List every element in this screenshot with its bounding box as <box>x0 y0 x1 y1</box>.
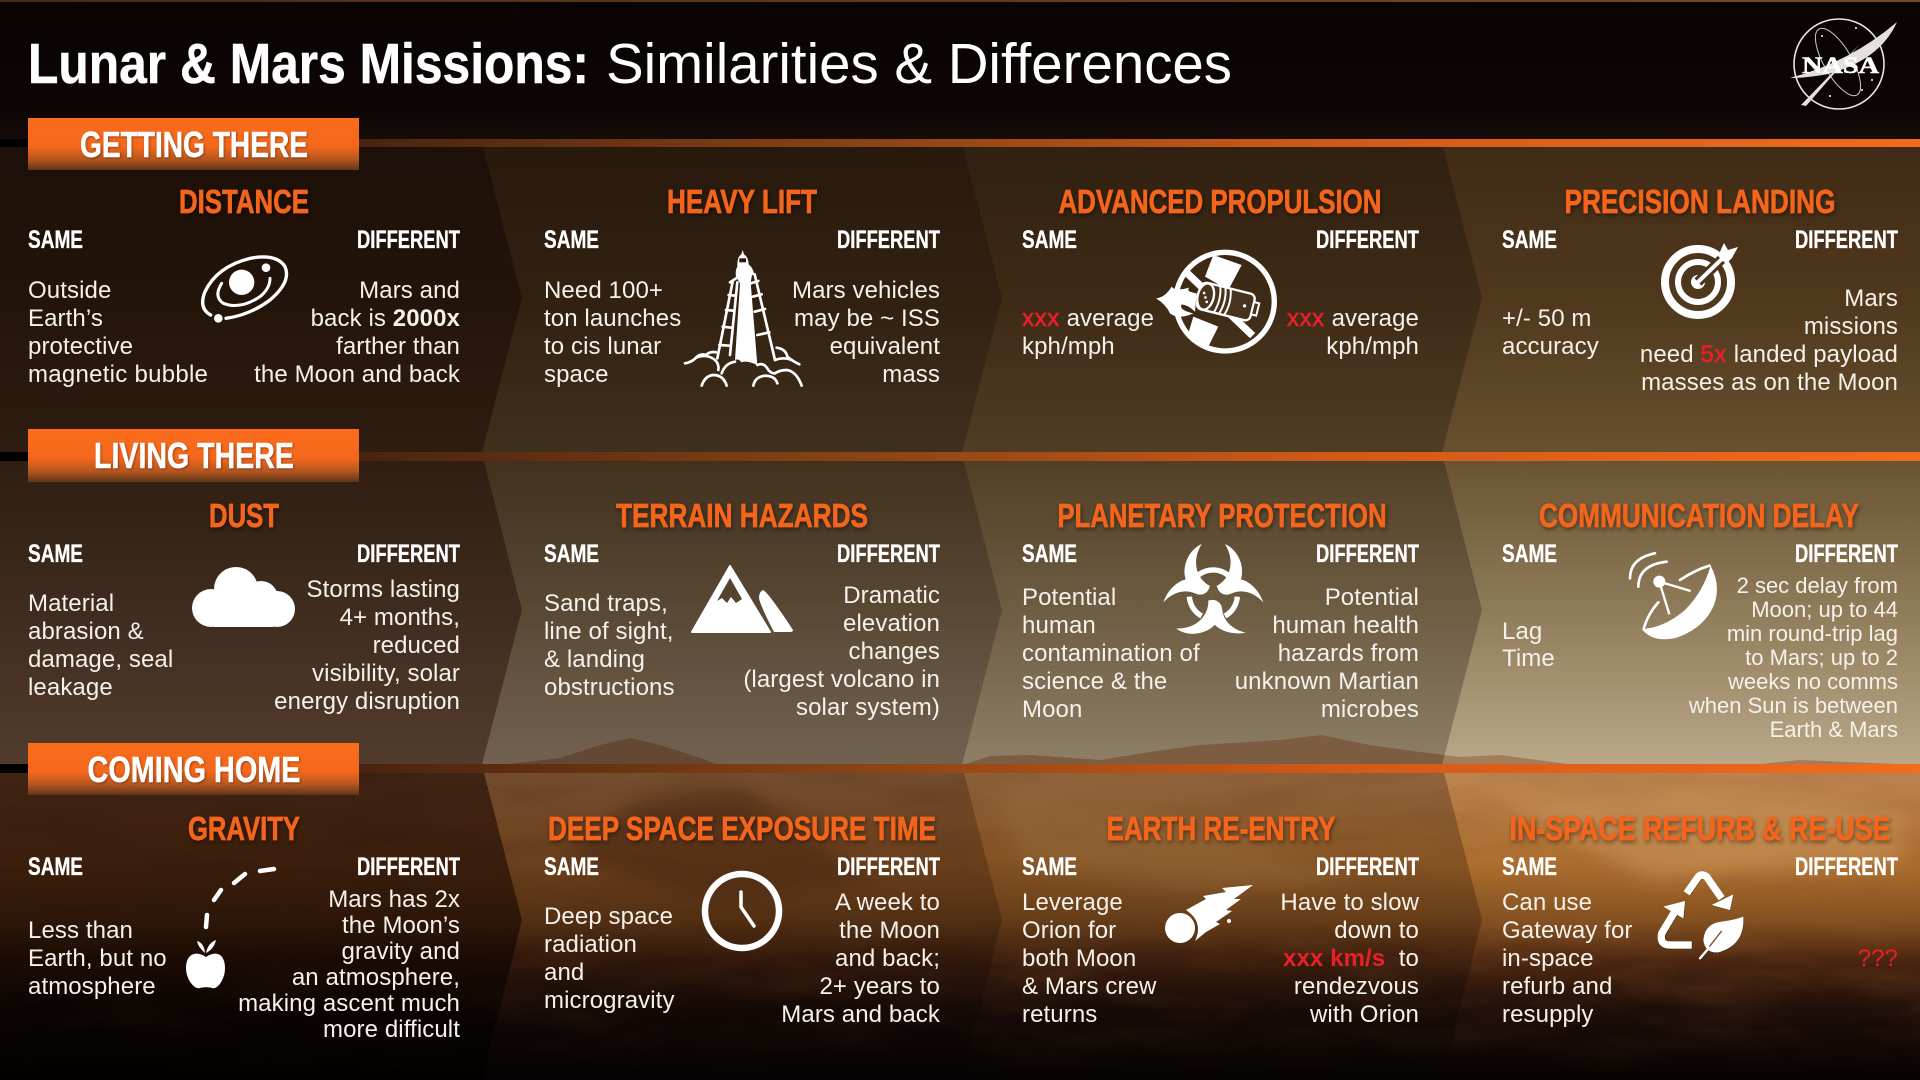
different column: precision landing: need 5x landed payload <box>1640 341 1898 368</box>
title <box>28 32 1232 96</box>
different column: distance: back is 2000x <box>311 305 461 332</box>
same column: heavy lift <box>544 226 681 388</box>
same column: planetary protection: Potential <box>1022 584 1116 611</box>
heading: terrain hazards: TERRAIN HAZARDS <box>616 497 868 534</box>
same column: in-space refurb: refurb and <box>1502 973 1612 1000</box>
same column: planetary protection: Moon <box>1022 696 1082 723</box>
panel: terrain hazards <box>544 497 940 721</box>
different column: distance: the Moon and back <box>254 361 461 388</box>
different column: deep space exposure <box>781 853 941 1028</box>
same column: earth re-entry: SAME <box>1022 853 1077 881</box>
different column: heavy lift: mass <box>882 361 940 388</box>
same column: gravity: SAME <box>28 853 83 881</box>
same column: earth re-entry: & Mars crew <box>1022 973 1157 1000</box>
different column: terrain hazards: (largest volcano in <box>743 666 940 693</box>
same column: distance: SAME <box>28 226 83 254</box>
same column: communication delay: Time <box>1502 645 1555 672</box>
panel: communication delay <box>1502 497 1898 742</box>
panel: deep space exposure time <box>544 810 941 1028</box>
icon: NASA logo <box>1790 19 1897 109</box>
same column: terrain hazards: obstructions <box>544 674 675 701</box>
different column: planetary protection <box>1235 540 1419 723</box>
different column: terrain hazards: Dramatic <box>843 582 940 609</box>
panel: earth re-entry <box>1022 810 1420 1028</box>
panel: in-space refurb and re-use <box>1502 810 1898 1028</box>
different column: precision landing: masses as on the Moon <box>1641 369 1898 396</box>
section badge: getting there <box>28 118 359 170</box>
same column: gravity: Less than <box>28 917 133 944</box>
different column: dust: energy disruption <box>274 688 460 715</box>
section badge: living there: LIVING THERE <box>94 435 294 476</box>
title: Similarities & Differences <box>606 32 1232 96</box>
different column: in-space refurb: ??? <box>1858 945 1898 972</box>
icon: biohazard <box>1163 544 1263 662</box>
panel: gravity <box>28 810 460 1043</box>
different column: planetary protection: unknown Martian <box>1235 668 1419 695</box>
heading: heavy lift: HEAVY LIFT <box>667 183 817 220</box>
icon: rocket <box>685 250 802 386</box>
heading: planetary protection: PLANETARY PROTECTION <box>1058 497 1386 534</box>
heading: advanced propulsion: ADVANCED PROPULSION <box>1058 183 1382 220</box>
same column: heavy lift: space <box>544 361 609 388</box>
different column: distance: Mars and <box>359 277 460 304</box>
different column: gravity: DIFFERENT <box>357 853 460 881</box>
heading: precision landing: PRECISION LANDING <box>1564 183 1836 220</box>
title: Lunar & Mars Missions: <box>28 32 589 96</box>
same column: earth re-entry: Orion for <box>1022 917 1116 944</box>
different column: communication delay: 2 sec delay from <box>1737 573 1898 598</box>
different column: planetary protection: hazards from <box>1278 640 1419 667</box>
icon: falling apple <box>186 869 274 988</box>
same column: in-space refurb: SAME <box>1502 853 1557 881</box>
same column: heavy lift: Need 100+ <box>544 277 663 304</box>
icon: target with arrow <box>1665 243 1738 315</box>
icon: orbit <box>203 257 287 323</box>
different column: dust: reduced <box>373 632 460 659</box>
same column: planetary protection: SAME <box>1022 540 1077 568</box>
different column: terrain hazards: solar system) <box>796 694 940 721</box>
different column: gravity: an atmosphere, <box>292 964 460 991</box>
same column: distance: Outside <box>28 277 111 304</box>
different column: precision landing: Mars <box>1844 285 1898 312</box>
same column: dust: Material <box>28 590 114 617</box>
heading: earth re-entry: EARTH RE-ENTRY <box>1106 810 1336 847</box>
same column: earth re-entry: both Moon <box>1022 945 1136 972</box>
different column: heavy lift: may be ~ ISS <box>794 305 940 332</box>
same column: distance <box>28 226 208 388</box>
different column: gravity: gravity and <box>342 938 460 965</box>
different column: dust: DIFFERENT <box>357 540 460 568</box>
panel: precision landing <box>1502 183 1898 396</box>
same column: precision landing: +/- 50 m <box>1502 305 1592 332</box>
different column: earth re-entry: rendezvous <box>1294 973 1419 1000</box>
same column: planetary protection: contamination of <box>1022 640 1200 667</box>
different column: heavy lift: equivalent <box>830 333 940 360</box>
different column: distance: DIFFERENT <box>357 226 460 254</box>
icon: spacecraft with solar panels <box>1156 252 1274 351</box>
same column: deep space exposure: radiation <box>544 931 637 958</box>
different column: terrain hazards: elevation <box>843 610 940 637</box>
icon: mountains <box>692 566 793 632</box>
same column: deep space exposure: SAME <box>544 853 599 881</box>
different column: earth re-entry: xxx km/s to <box>1283 945 1419 972</box>
different column: terrain hazards: changes <box>849 638 940 665</box>
different column: precision landing: missions <box>1804 313 1898 340</box>
different column: deep space exposure: the Moon <box>839 917 940 944</box>
same column: advanced propulsion <box>1022 226 1154 360</box>
section badge: getting there: GETTING THERE <box>80 124 308 165</box>
different column: deep space exposure: Mars and back <box>781 1001 941 1028</box>
same column: heavy lift: ton launches <box>544 305 681 332</box>
different column: gravity: the Moon’s <box>342 912 460 939</box>
same column: heavy lift: SAME <box>544 226 599 254</box>
different column: terrain hazards <box>743 540 940 721</box>
icon: satellite dish <box>1630 553 1717 639</box>
different column: deep space exposure: and back; <box>835 945 940 972</box>
same column: dust: leakage <box>28 674 113 701</box>
same column: advanced propulsion: xxx average <box>1022 305 1154 332</box>
same column: communication delay: Lag <box>1502 618 1542 645</box>
different column: communication delay: when Sun is between <box>1688 693 1898 718</box>
same column: earth re-entry <box>1022 853 1157 1028</box>
different column: deep space exposure: A week to <box>835 889 940 916</box>
same column: in-space refurb: in-space <box>1502 945 1594 972</box>
same column: in-space refurb: resupply <box>1502 1001 1594 1028</box>
same column: distance: Earth’s <box>28 305 103 332</box>
same column: distance: protective <box>28 333 133 360</box>
same column: dust: SAME <box>28 540 83 568</box>
same column: dust <box>28 540 173 701</box>
same column: terrain hazards: Sand traps, <box>544 590 668 617</box>
same column: precision landing <box>1502 226 1599 360</box>
different column: gravity: Mars has 2x <box>328 886 460 913</box>
same column: deep space exposure <box>544 853 675 1014</box>
icon: recycle with leaf <box>1661 875 1743 958</box>
same column: terrain hazards: line of sight, <box>544 618 673 645</box>
same column: dust: damage, seal <box>28 646 173 673</box>
different column: gravity: making ascent much <box>238 990 460 1017</box>
same column: terrain hazards: SAME <box>544 540 599 568</box>
same column: advanced propulsion: kph/mph <box>1022 333 1115 360</box>
icon: NASA logo: NASA <box>1802 53 1879 78</box>
different column: distance <box>254 226 461 388</box>
different column: communication delay <box>1688 540 1898 742</box>
same column: deep space exposure: and <box>544 959 584 986</box>
heading: distance: DISTANCE <box>179 183 309 220</box>
same column: advanced propulsion: SAME <box>1022 226 1077 254</box>
same column: earth re-entry: returns <box>1022 1001 1097 1028</box>
different column: earth re-entry: Have to slow <box>1280 889 1420 916</box>
panel: advanced propulsion <box>1022 183 1419 360</box>
different column: heavy lift: DIFFERENT <box>837 226 940 254</box>
different column: deep space exposure: 2+ years to <box>819 973 940 1000</box>
same column: precision landing: SAME <box>1502 226 1557 254</box>
same column: planetary protection <box>1022 540 1200 723</box>
different column: gravity: more difficult <box>323 1016 460 1043</box>
panel: dust <box>28 497 460 715</box>
same column: earth re-entry: Leverage <box>1022 889 1123 916</box>
heading: gravity: GRAVITY <box>188 810 300 847</box>
panel: planetary protection <box>1022 497 1419 723</box>
different column: earth re-entry <box>1280 853 1420 1028</box>
same column: precision landing: accuracy <box>1502 333 1599 360</box>
different column: planetary protection: human health <box>1272 612 1419 639</box>
same column: gravity: atmosphere <box>28 973 156 1000</box>
different column: communication delay: weeks no comms <box>1727 669 1898 694</box>
panel: heavy lift <box>544 183 940 388</box>
different column: dust: Storms lasting <box>307 576 460 603</box>
same column: heavy lift: to cis lunar <box>544 333 661 360</box>
different column: planetary protection: Potential <box>1325 584 1419 611</box>
same column: planetary protection: human <box>1022 612 1096 639</box>
different column: precision landing <box>1640 226 1898 396</box>
different column: dust: visibility, solar <box>312 660 460 687</box>
same column: deep space exposure: Deep space <box>544 903 673 930</box>
different column: distance: farther than <box>336 333 460 360</box>
different column: terrain hazards: DIFFERENT <box>837 540 940 568</box>
different column: planetary protection: DIFFERENT <box>1316 540 1419 568</box>
same column: dust: abrasion & <box>28 618 144 645</box>
icon: dust cloud <box>192 567 295 627</box>
heading: dust: DUST <box>209 497 279 534</box>
section badge: coming home: COMING HOME <box>88 749 300 790</box>
icon: clock <box>705 874 779 948</box>
different column: gravity <box>238 853 460 1043</box>
different column: in-space refurb <box>1795 853 1898 972</box>
different column: communication delay: Moon; up to 44 <box>1751 597 1898 622</box>
different column: communication delay: Earth & Mars <box>1770 717 1898 742</box>
same column: gravity: Earth, but no <box>28 945 167 972</box>
different column: earth re-entry: DIFFERENT <box>1316 853 1419 881</box>
same column: in-space refurb: Gateway for <box>1502 917 1632 944</box>
different column: dust: 4+ months, <box>340 604 460 631</box>
same column: planetary protection: science & the <box>1022 668 1167 695</box>
same column: communication delay: SAME <box>1502 540 1557 568</box>
same column: distance: magnetic bubble <box>28 361 208 388</box>
icon: comet <box>1161 885 1253 947</box>
section badge: coming home <box>28 743 359 795</box>
same column: communication delay <box>1502 540 1557 672</box>
different column: heavy lift <box>792 226 940 388</box>
same column: gravity <box>28 853 167 1000</box>
different column: advanced propulsion: kph/mph <box>1326 333 1419 360</box>
different column: communication delay: to Mars; up to 2 <box>1745 645 1898 670</box>
different column: advanced propulsion: DIFFERENT <box>1316 226 1419 254</box>
different column: communication delay: min round-trip lag <box>1727 621 1898 646</box>
same column: terrain hazards <box>544 540 675 701</box>
different column: earth re-entry: down to <box>1334 917 1419 944</box>
different column: dust <box>274 540 460 715</box>
different column: advanced propulsion <box>1287 226 1419 360</box>
same column: deep space exposure: microgravity <box>544 987 675 1014</box>
different column: advanced propulsion: xxx average <box>1287 305 1419 332</box>
different column: heavy lift: Mars vehicles <box>792 277 940 304</box>
same column: in-space refurb: Can use <box>1502 889 1592 916</box>
heading: deep space exposure time: DEEP SPACE EXPOSURE TIME <box>548 810 936 847</box>
section badge: living there <box>28 429 359 482</box>
different column: planetary protection: microbes <box>1321 696 1419 723</box>
different column: deep space exposure: DIFFERENT <box>837 853 940 881</box>
same column: terrain hazards: & landing <box>544 646 645 673</box>
same column: in-space refurb <box>1502 853 1632 1028</box>
different column: earth re-entry: with Orion <box>1309 1001 1419 1028</box>
panel: distance <box>28 183 461 388</box>
